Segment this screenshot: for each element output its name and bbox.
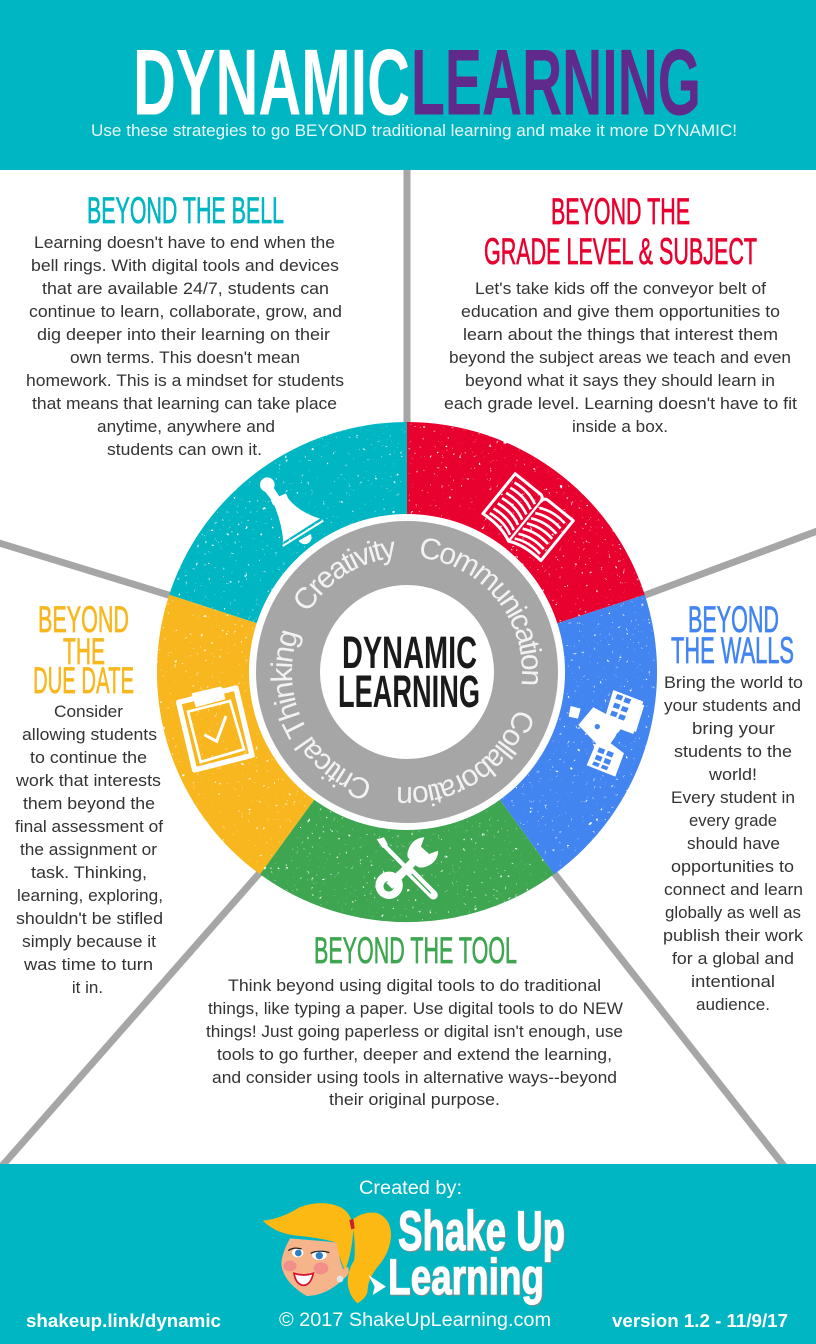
title: DYNAMIC — [133, 30, 410, 134]
ring words: Communication — [421, 538, 542, 684]
text block: due date — [15, 702, 163, 997]
text block: the tool — [206, 976, 623, 1109]
text block: due date: work that interests — [15, 771, 161, 790]
text block: beyond the bell: that are available 24/7, students can — [42, 279, 329, 298]
icon: wrench and screwdriver — [375, 837, 438, 899]
text block: beyond the bell: students can own it. — [107, 440, 262, 459]
footer band — [0, 1164, 816, 1344]
text block: the walls — [663, 673, 804, 1014]
text block: the tool: things, like typing a paper. Use digital tools to do NEW — [208, 999, 623, 1018]
text block: the tool: things! Just going paperless or digital isn't enough, use — [206, 1022, 623, 1041]
header band — [0, 0, 816, 170]
text block: due date: to continue the — [30, 748, 147, 767]
version: version 1.2 - 11/9/17 — [612, 1311, 788, 1331]
text block: grade level and subject: learn about the things that interest them — [463, 325, 778, 344]
icon: bell — [260, 477, 323, 546]
heading: grade level and subject: BEYOND THE — [551, 191, 690, 232]
ring words: Critical Thinking — [270, 630, 369, 798]
text block: the walls: Bring the world to — [664, 673, 803, 692]
divider spokes — [0, 170, 816, 1166]
text block: grade level and subject — [444, 279, 797, 436]
heading: beyond the bell: BEYOND THE BELL — [87, 190, 284, 231]
heading: due date: THE — [63, 631, 105, 672]
text block: beyond the bell: that means that learning can take place — [32, 394, 337, 413]
text block: the tool: and consider using tools in alternative ways--beyond — [212, 1068, 617, 1087]
text block: grade level and subject: beyond what it says they should learn in — [465, 371, 775, 390]
sector: clipboard — [157, 595, 314, 874]
text block: the tool: Think beyond using digital tools to do traditional — [228, 976, 601, 995]
created by label: Created by: — [359, 1178, 462, 1199]
text block: the walls: connect and learn — [664, 880, 803, 899]
text block: grade level and subject: beyond the subject areas we teach and even — [449, 348, 791, 367]
text block: the walls: your students and — [664, 696, 801, 715]
heading: due date: BEYOND — [38, 599, 129, 640]
text block: due date: shouldn't be stifled — [16, 909, 163, 928]
text block: beyond the bell: homework. This is a mindset for students — [26, 371, 344, 390]
heading: grade level and subject — [484, 191, 757, 272]
text block: beyond the bell: own terms. This doesn't mean — [70, 348, 300, 367]
text block: the tool: tools to go further, deeper and extend the learning, — [217, 1045, 612, 1064]
text block: beyond the bell — [26, 233, 344, 459]
ring words — [270, 538, 542, 806]
ring diagram — [156, 422, 658, 922]
text block: beyond the bell: anytime, anywhere and — [97, 417, 275, 436]
text block: due date: Consider — [54, 702, 123, 721]
text block: the walls: for a global and — [672, 949, 794, 968]
subtitle: Use these strategies to go BEYOND traditional learning and make it more DYNAMIC! — [91, 121, 737, 140]
icon: open book — [480, 474, 573, 565]
copyright: © 2017 ShakeUpLearning.com — [279, 1310, 551, 1331]
text block: due date: final assessment of — [15, 817, 163, 836]
icon: school building — [569, 690, 643, 777]
footer short link: shakeup.link/dynamic — [26, 1311, 221, 1331]
icon: clipboard with check — [179, 687, 252, 770]
text block: due date: it in. — [72, 978, 103, 997]
text block: grade level and subject: Let's take kids off the conveyor belt of — [475, 279, 766, 298]
sector: school — [500, 595, 657, 874]
centre label: DYNAMIC — [342, 627, 477, 678]
text block: the walls: audience. — [696, 995, 770, 1014]
text block: due date: allowing students — [22, 725, 157, 744]
text block: the walls: students to the — [674, 742, 792, 761]
logo: cartoon head — [263, 1203, 391, 1303]
text block: the walls: every grade — [689, 811, 777, 830]
ring words: Creativity — [295, 540, 394, 608]
panel: beyond the grade level and subject — [444, 191, 797, 436]
text block: the walls: publish their work — [663, 926, 804, 945]
inner grey ring — [288, 553, 526, 791]
ring words: Collaboration — [398, 712, 532, 806]
text block: the walls: bring your — [692, 719, 775, 738]
heading: the tool: BEYOND THE TOOL — [314, 930, 517, 971]
text block: beyond the bell: Learning doesn't have to end when the — [34, 233, 335, 252]
text block: the walls: Every student in — [671, 788, 795, 807]
text block: beyond the bell: continue to learn, collaborate, grow, and — [29, 302, 342, 321]
centre label — [338, 627, 480, 717]
panel: beyond the due date — [15, 599, 163, 997]
text block: due date: them beyond the — [23, 794, 155, 813]
text block: the walls: opportunities to — [671, 857, 794, 876]
text block: grade level and subject: inside a box. — [572, 417, 668, 436]
panel: beyond the bell — [26, 190, 344, 459]
text block: the walls: globally as well as — [665, 903, 801, 922]
text block: grade level and subject: each grade level. Learning doesn't have to fit — [444, 394, 797, 413]
text block: the walls: world! — [708, 765, 757, 784]
text block: grade level and subject: education and give them opportunities to — [461, 302, 780, 321]
heading: due date: DUE DATE — [33, 660, 134, 701]
text block: the tool: their original purpose. — [329, 1090, 500, 1109]
text block: due date: simply because it — [22, 932, 156, 951]
panel: beyond the tool — [206, 930, 623, 1109]
text block: due date: the assignment or — [20, 840, 157, 859]
text block: due date: was time to turn — [23, 955, 153, 974]
text block: the walls: should have — [687, 834, 780, 853]
logo: wordmark: Shake Up — [398, 1199, 565, 1262]
heading: due date — [33, 599, 134, 701]
panel: beyond the walls — [663, 599, 804, 1014]
logo: wordmark — [388, 1199, 565, 1305]
text block: beyond the bell: bell rings. With digital tools and devices — [31, 256, 339, 275]
text block: beyond the bell: dig deeper into their learning on their — [37, 325, 330, 344]
centre label: LEARNING — [338, 666, 480, 717]
text block: due date: task. Thinking, — [31, 863, 147, 882]
heading: the walls — [671, 599, 794, 671]
text block: the walls: intentional — [691, 972, 775, 991]
logo: wordmark: Learning — [388, 1249, 544, 1305]
text block: due date: learning, exploring, — [17, 886, 163, 905]
sector: book — [407, 422, 645, 623]
sector: bell — [169, 422, 407, 623]
sector: tools — [260, 800, 554, 922]
